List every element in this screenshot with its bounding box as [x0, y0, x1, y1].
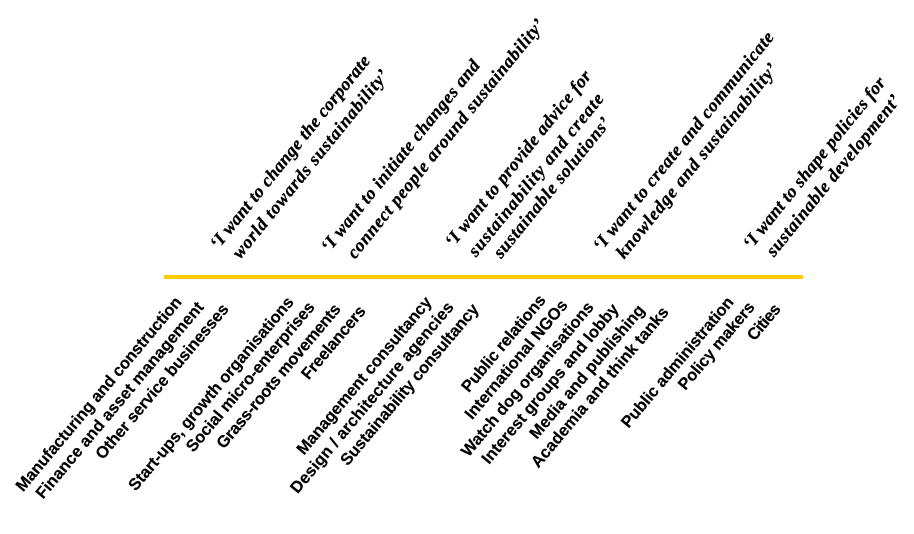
label: watch dog: Watch dog organisations	[458, 299, 598, 460]
group: corporate sectors	[12, 294, 233, 502]
yellow axis line	[164, 275, 803, 279]
label: media: Media and publishing	[526, 302, 649, 443]
group: knowledge and communication	[458, 292, 673, 471]
label: international NGOs: International NGOs	[461, 297, 572, 423]
group: policy	[618, 294, 785, 431]
label: grass-roots: Grass-roots movements	[213, 301, 345, 452]
label: management consultancy: Management consultancy	[293, 293, 436, 458]
label: cities: Cities	[744, 301, 785, 344]
label: freelancers: Freelancers	[298, 303, 370, 383]
label: other services: Other service businesses	[92, 301, 233, 463]
quote: shape policies: ‘I want to shape policies for	[739, 72, 890, 253]
label: academia: Academia and think tanks	[528, 304, 673, 471]
quote: create and communicate knowledge: ‘I want to create and communicate	[589, 27, 778, 255]
quote: shape policies: sustainable development’	[761, 90, 904, 261]
quote: initiate changes: ‘I want to initiate changes and	[317, 55, 484, 256]
group: change makers	[125, 294, 370, 494]
label: manufacturing: Manufacturing and construction	[12, 294, 186, 495]
quote: provide advice: sustainable solutions’	[488, 113, 614, 262]
label: start-ups: Start-ups, growth organisations	[125, 294, 298, 494]
label: finance: Finance and asset management	[32, 298, 208, 502]
group: consultancy	[287, 293, 483, 497]
quote: provide advice: sustainability and create	[463, 89, 608, 261]
label: policy makers: Policy makers	[675, 299, 759, 394]
label: design agencies: Design / architecture agencies	[287, 299, 458, 497]
quote: change the corporate world: world towards sustainability’	[228, 65, 392, 262]
label: public administration: Public administration	[618, 294, 738, 431]
quote: initiate changes: connect people around sustainability’	[343, 15, 548, 262]
label: interest groups: Interest groups and lobby	[478, 300, 623, 468]
label: social micro-enterprises: Social micro-enterprises	[183, 299, 319, 456]
quote: create and communicate knowledge: knowledge and sustainability’	[612, 59, 781, 262]
label: sustainability consultancy: Sustainability consultancy	[337, 300, 483, 469]
quote: change the corporate world: ‘I want to change the corporate	[206, 51, 374, 253]
quote: provide advice: ‘I want to provide advice for	[441, 65, 596, 251]
label: public relations: Public relations	[458, 292, 550, 396]
